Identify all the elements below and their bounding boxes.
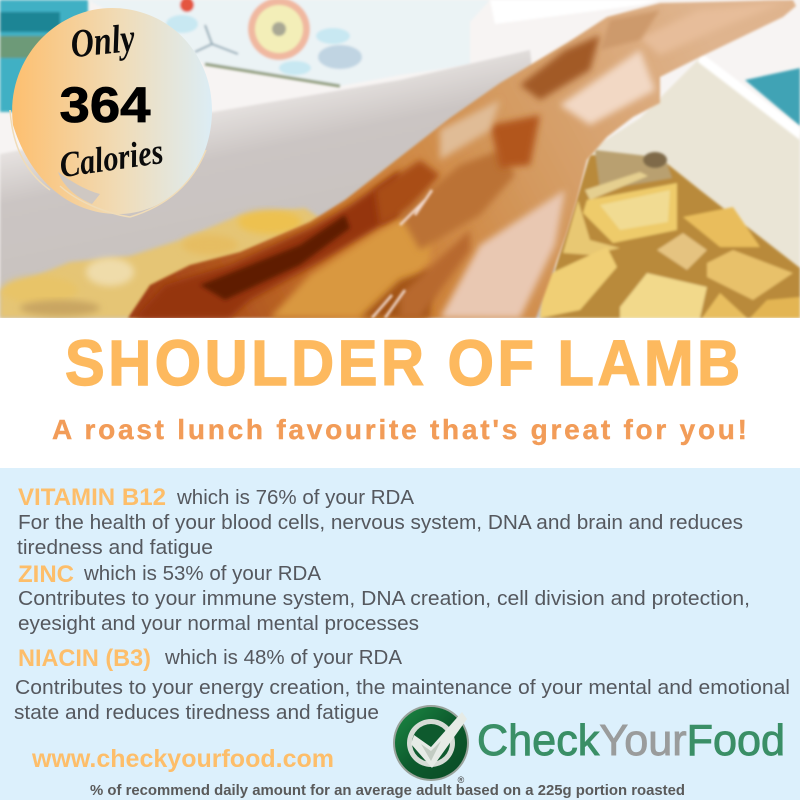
zinc description [18, 588, 750, 635]
niacin description: Contributes to your energy creation, the maintenance of your mental and emotional [15, 677, 790, 699]
zinc heading: ZINC [18, 561, 74, 588]
panel background [0, 468, 800, 800]
vitamin B12 description: For the health of your blood cells, nervous system, DNA and brain and reduces [18, 512, 743, 534]
panel: nutrients [0, 468, 800, 800]
zinc description: eyesight and your normal mental processes [18, 613, 419, 635]
niacin description [14, 677, 790, 724]
calorie badge [10, 8, 212, 217]
badge: brushed circle [10, 8, 212, 217]
badge: 364: 364 [60, 77, 151, 133]
photo: teal towel [0, 0, 88, 112]
niacin description: state and reduces tiredness and fatigue [14, 702, 379, 724]
niacin heading [18, 645, 403, 672]
logo icon [393, 705, 469, 785]
logo: CheckYourFood [393, 705, 785, 785]
badge: Calories: Calories [57, 131, 166, 185]
photo: lamb body [128, 0, 796, 318]
photo: dish right wall [592, 60, 800, 269]
title: SHOULDER OF LAMB [65, 328, 740, 399]
photo: patterned napkin [88, 0, 490, 86]
vitamin B12 heading: VITAMIN B12 [18, 484, 166, 511]
photo: roast lamb shoulder in dish [0, 0, 800, 318]
photo: white paper edge [492, 0, 649, 23]
vitamin B12 description [17, 512, 743, 559]
zinc description: Contributes to your immune system, DNA creation, cell division and protection, [18, 588, 750, 610]
photo: lamb glaze and highlights [135, 2, 785, 318]
niacin heading: NIACIN (B3) [18, 645, 151, 672]
niacin heading: which is 48% of your RDA [164, 647, 403, 669]
zinc heading: which is 53% of your RDA [83, 563, 322, 585]
photo: dish inner wall left [0, 50, 560, 318]
photo: dish right rim [698, 52, 800, 140]
vitamin B12 description: tiredness and fatigue [17, 537, 213, 559]
website link: www.checkyourfood.com [31, 745, 334, 773]
vitamin B12 heading: which is 76% of your RDA [176, 487, 415, 509]
footnote: % of recommend daily amount for an average adult based on a 225g portion roasted [90, 782, 685, 799]
badge: Only: Only [68, 15, 137, 66]
zinc heading [18, 561, 322, 588]
registered mark: ® [458, 775, 465, 785]
subtitle: A roast lunch favourite that's great for you! [52, 414, 747, 445]
photo: teal placemat [745, 68, 800, 126]
vitamin B12 heading [18, 484, 415, 511]
photo: potatoes right [540, 150, 800, 318]
photo: table surface [0, 0, 800, 154]
logo wordmark: CheckYourFood [477, 716, 785, 765]
photo: potatoes left [0, 208, 330, 318]
